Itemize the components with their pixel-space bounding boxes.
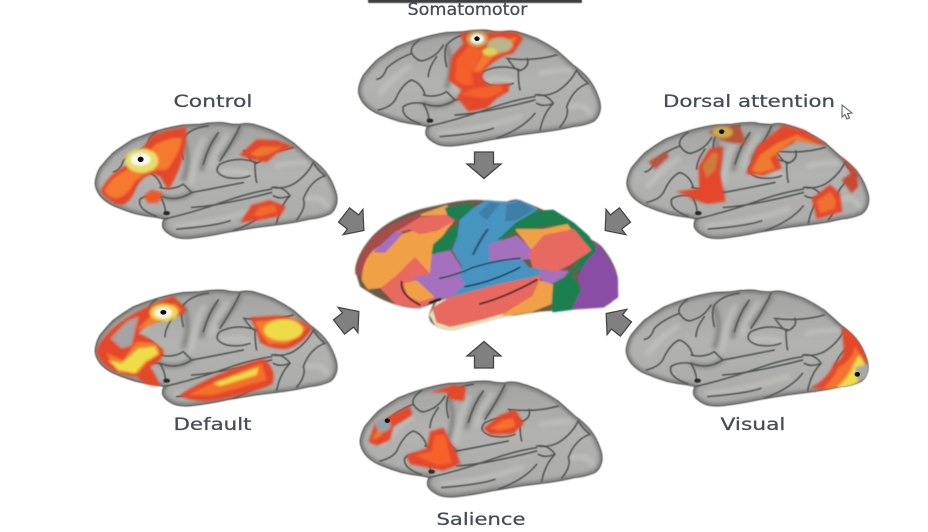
- label: Somatomotor: Somatomotor: [408, 0, 528, 20]
- brain: default: [95, 290, 337, 406]
- panel: dorsal attention: [627, 92, 869, 239]
- arrow: salience to centre: [467, 342, 501, 368]
- label: Dorsal attention: Dorsal attention: [663, 92, 835, 112]
- arrow: dorsal attention to centre: [595, 202, 635, 243]
- label: Control: Control: [174, 92, 252, 112]
- top dark bar: [368, 0, 582, 3]
- panel: control: [95, 92, 337, 239]
- arrow: default to centre: [329, 299, 369, 340]
- label: Salience: Salience: [436, 510, 526, 530]
- brain: salience: [360, 381, 602, 497]
- brain: visual: [626, 290, 868, 406]
- brain: control: [95, 122, 337, 239]
- label: Default: Default: [174, 415, 252, 435]
- panel: default: [95, 290, 337, 435]
- panel: visual: [626, 290, 868, 435]
- arrow: somatomotor to centre: [467, 152, 501, 178]
- icon: mouse cursor: [842, 105, 852, 119]
- brain: dorsal attention: [627, 122, 869, 239]
- label: Visual: Visual: [720, 415, 786, 435]
- arrow: visual to centre: [596, 301, 636, 342]
- panel: centre parcellated brain: [355, 199, 618, 331]
- panel: somatomotor: [358, 0, 601, 146]
- panel: salience: [360, 381, 602, 530]
- brain: somatomotor: [358, 30, 601, 146]
- arrow: control to centre: [334, 202, 374, 243]
